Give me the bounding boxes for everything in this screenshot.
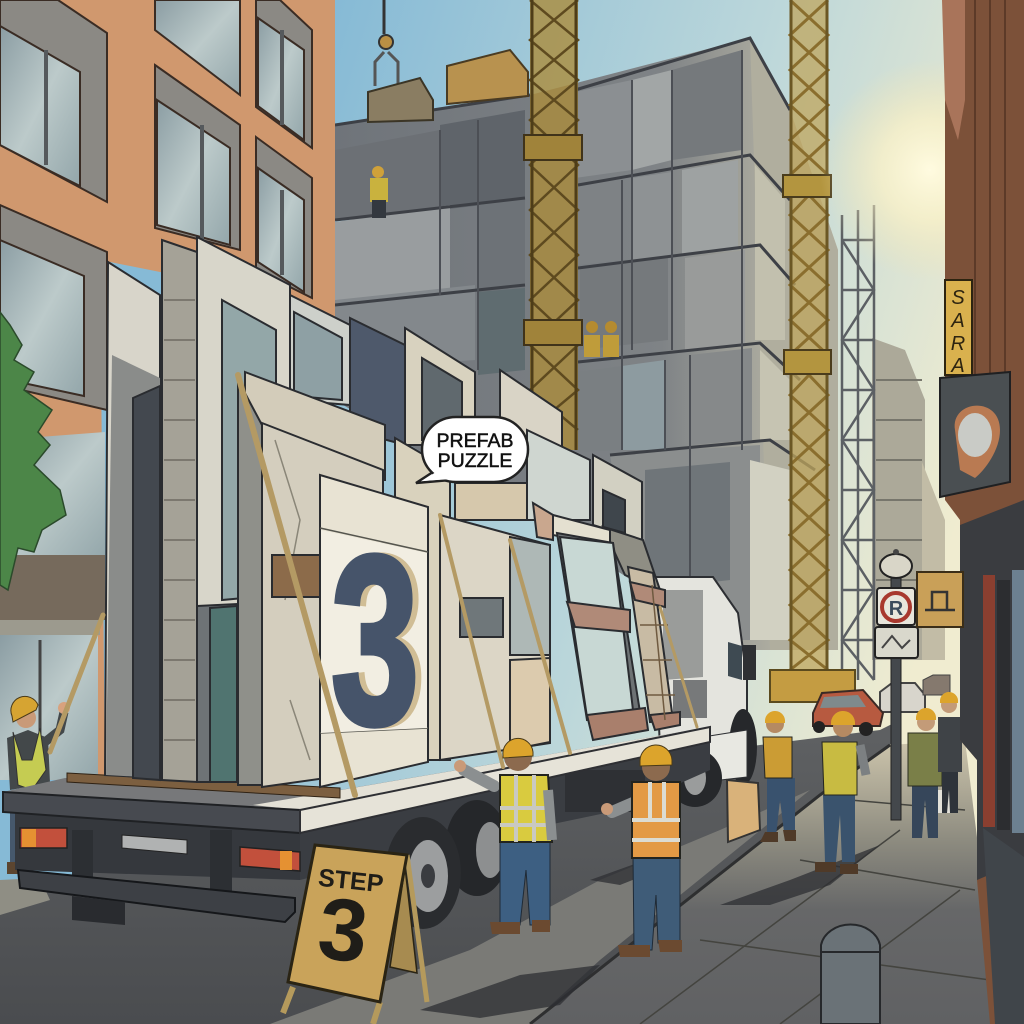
step 3 sign: 3	[314, 878, 373, 981]
truck chassis and wheels	[300, 742, 710, 929]
crane lifting a load	[368, 0, 528, 122]
pedestrian dark coat	[938, 692, 962, 813]
step 3 sign	[283, 845, 427, 1024]
crane tower left	[524, 0, 582, 450]
speech bubble: PREFAB	[437, 430, 513, 452]
distant building	[872, 338, 945, 660]
street lamp and signs: R	[889, 598, 904, 620]
right building	[942, 0, 1024, 1024]
shop sign SARA: A	[950, 355, 965, 377]
right sidewalk	[530, 740, 1000, 1024]
construction workers on upper floors	[370, 166, 619, 357]
worker with vest	[815, 711, 866, 874]
crane tower right	[783, 0, 831, 670]
street lamp and signs	[875, 549, 963, 820]
distant traffic and materials	[770, 670, 950, 736]
hanging picture sign	[940, 372, 1010, 497]
worker far	[760, 711, 796, 842]
truck cab	[653, 577, 757, 807]
shop sign SARA: A	[950, 310, 965, 332]
tree	[0, 312, 66, 590]
brick lines on panel	[164, 300, 195, 740]
speech bubble: PUZZLE	[438, 450, 512, 472]
big panel with number 3: 3	[331, 507, 419, 775]
left worker	[7, 696, 70, 874]
worker in yellow vest	[454, 738, 552, 934]
sandwich board small	[727, 780, 760, 842]
rear upright panels	[105, 237, 642, 782]
sun glow	[820, 60, 1024, 280]
speech bubble	[416, 417, 528, 483]
shop sign SARA: R	[951, 333, 965, 355]
central building under construction	[335, 38, 838, 650]
window and marble panels on the bed	[440, 503, 680, 760]
timber beam on the bed	[67, 773, 340, 798]
left brick building	[0, 0, 335, 780]
shop sign SARA: S	[951, 287, 965, 309]
worker in orange vest	[601, 745, 682, 957]
pedestrian olive coat	[908, 708, 954, 838]
step 3 sign: STEP	[317, 864, 385, 898]
bollard	[821, 925, 880, 1024]
big panel with number 3: 3	[337, 507, 425, 775]
truck flatbed	[3, 727, 710, 925]
scaffold tower	[842, 205, 874, 680]
wooden support struts	[50, 375, 697, 795]
street shadows	[420, 845, 880, 1018]
road	[0, 720, 900, 1024]
lit road area	[270, 790, 810, 1024]
marble panels	[238, 372, 385, 787]
shop sign SARA	[945, 280, 972, 377]
left pavement	[0, 878, 50, 915]
